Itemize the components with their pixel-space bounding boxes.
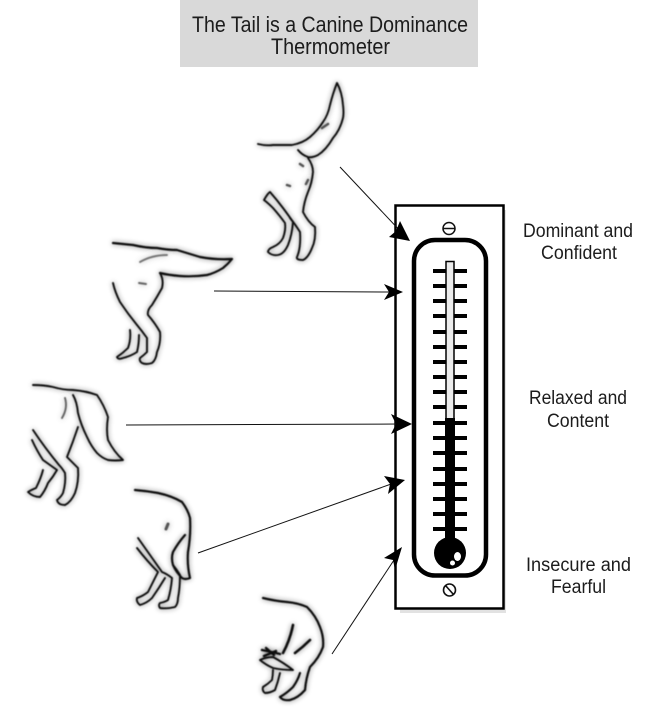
thermometer tube (446, 262, 454, 420)
title (180, 0, 478, 67)
arrow: dominant tail (340, 167, 410, 241)
label: insecure and fearful (526, 555, 631, 598)
thermometer scale ticks (433, 271, 467, 529)
illustration: dog with relaxed tail (28, 385, 123, 505)
arrow: relaxed tail (126, 414, 412, 434)
label: dominant and confident: Dominant and (523, 221, 633, 242)
arrow: lowered tail (198, 476, 405, 553)
thermometer bulb (434, 537, 466, 569)
label: insecure and fearful: Insecure and (526, 555, 631, 576)
icon: no sign (444, 584, 456, 596)
thermometer mercury column (445, 418, 455, 543)
illustration: dog with lowered tail (135, 490, 190, 608)
label: relaxed and content: Relaxed and (529, 388, 627, 409)
arrow: horizontal tail (214, 284, 403, 300)
illustration: dog with tail raised high (258, 83, 344, 260)
label: dominant and confident: Confident (541, 243, 618, 264)
illustration: dog with tucked tail (260, 598, 323, 700)
illustration: dog with tail held horizontal (113, 243, 232, 364)
title: The Tail is a Canine Dominance (192, 12, 468, 37)
title: Thermometer (271, 34, 390, 59)
arrow: tucked tail (332, 547, 402, 654)
label: dominant and confident (523, 221, 633, 264)
label: relaxed and content: Content (547, 411, 610, 432)
thermometer capsule (414, 240, 486, 576)
icon: minus sign (443, 222, 455, 234)
thermometer panel (396, 206, 506, 613)
label: insecure and fearful: Fearful (551, 577, 606, 598)
label: relaxed and content (529, 388, 627, 432)
